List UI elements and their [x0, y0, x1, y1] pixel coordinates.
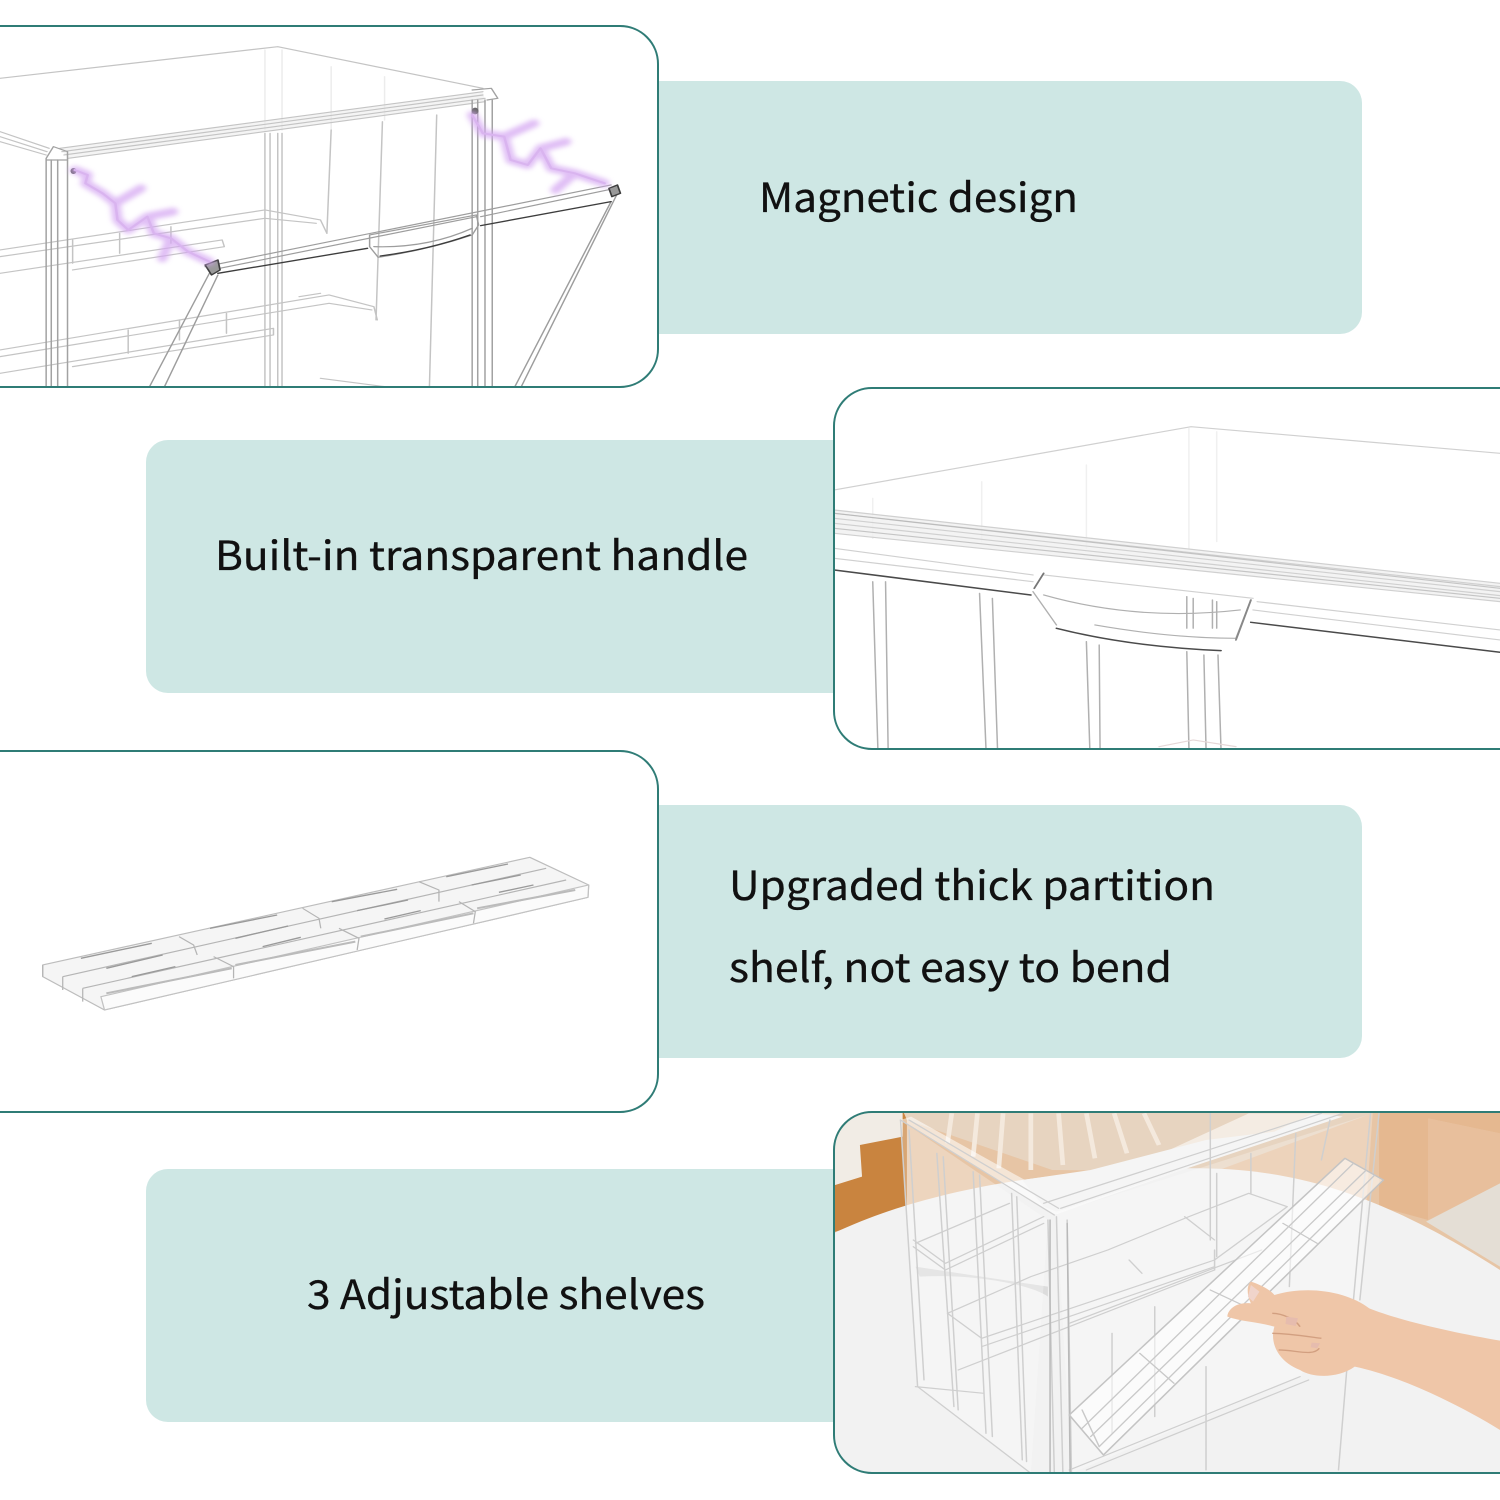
banner: built-in handle — [146, 440, 842, 693]
label: magnetic design: Magnetic design — [759, 166, 1078, 224]
hand and arm — [1227, 1282, 1500, 1430]
panel: partition shelf illustration — [0, 751, 658, 1112]
banner: adjustable shelves — [146, 1169, 842, 1422]
background: white table — [835, 1168, 1500, 1310]
panel: adjustable shelves photo — [830, 1110, 1500, 1477]
panel: magnetic door illustration — [0, 26, 658, 387]
panel: transparent handle closeup — [834, 388, 1500, 749]
illustration: partition shelf — [43, 857, 589, 1010]
label: thick partition shelf: Upgraded thick partition — [729, 854, 1215, 912]
label: built-in handle: Built-in transparent handle — [215, 524, 748, 582]
held shelf — [1069, 1158, 1383, 1455]
label: adjustable shelves: 3 Adjustable shelves — [307, 1263, 705, 1321]
background: wood room — [835, 1113, 1500, 1270]
banner: thick partition shelf — [650, 805, 1362, 1058]
label: thick partition shelf: shelf, not easy to bend — [729, 936, 1172, 994]
banner: magnetic design — [650, 81, 1362, 334]
display box frame — [901, 1113, 1383, 1473]
